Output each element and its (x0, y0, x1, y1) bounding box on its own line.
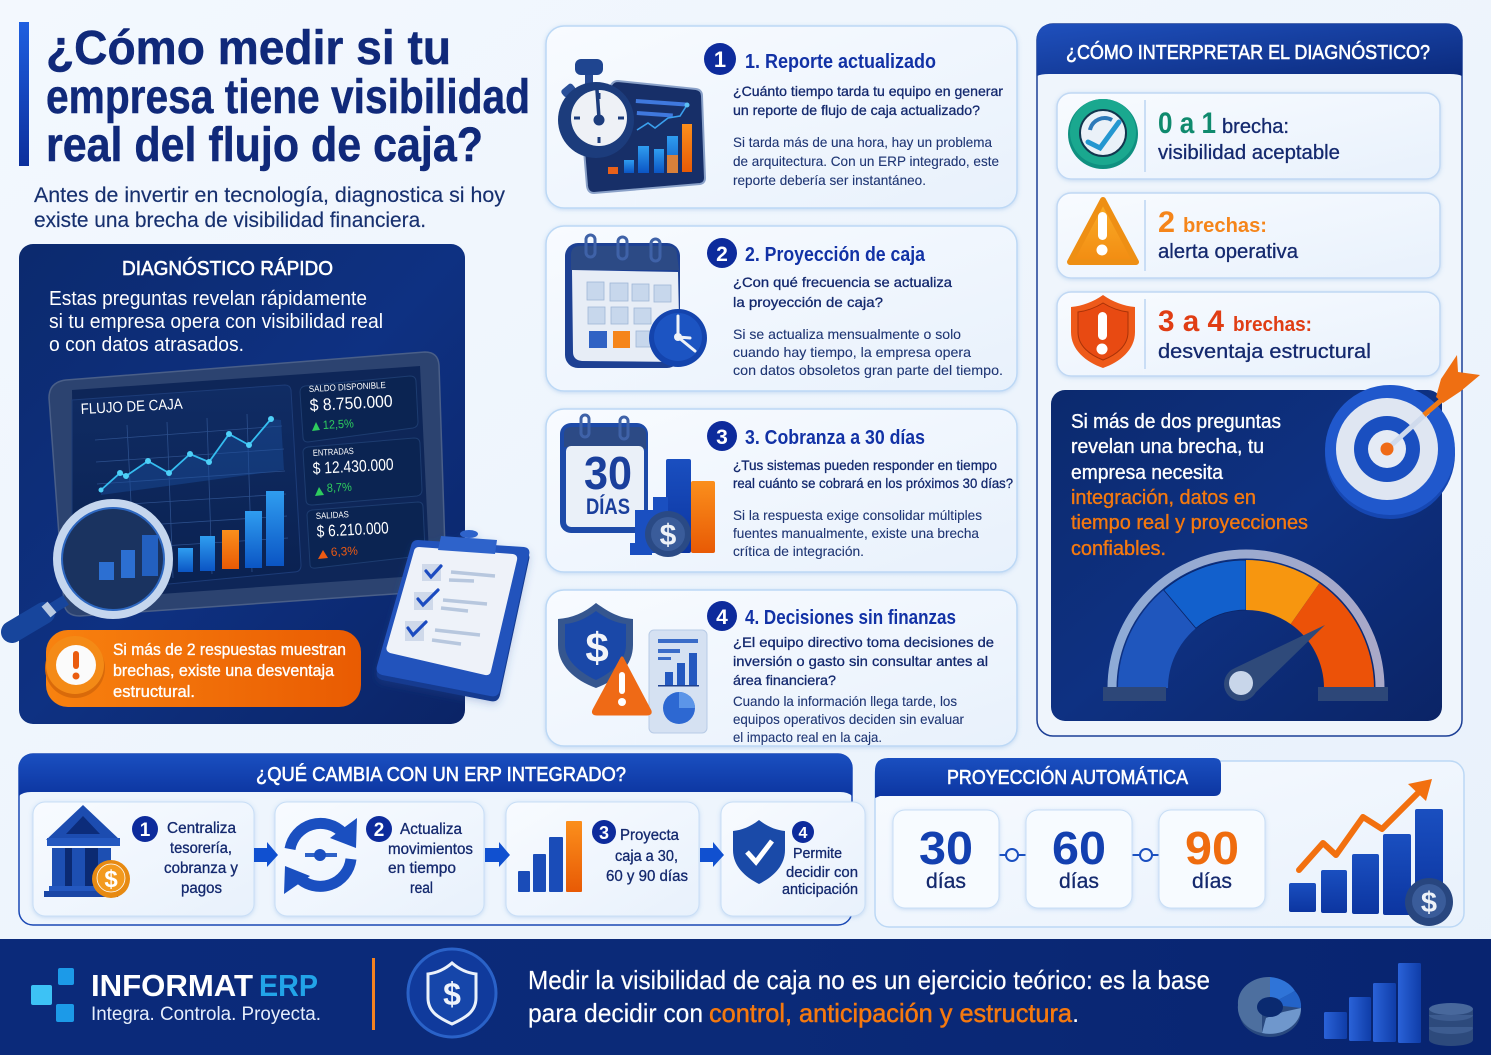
logo: Integra. Controla. Proyecta. (91, 1004, 321, 1025)
text (388, 821, 473, 897)
card: reporte actualizado (546, 26, 1017, 208)
explanation (733, 134, 999, 188)
intro text: si tu empresa opera con visibilidad real (49, 311, 383, 333)
text: en tiempo (388, 860, 456, 877)
explanation: de arquitectura. Con un ERP integrado, este (733, 153, 999, 169)
logo: ERP (259, 968, 318, 1003)
row: 0 a 1 brecha (1057, 93, 1440, 179)
text: Proyecta (620, 827, 679, 844)
icon: teal gauge check (1068, 99, 1138, 169)
icon: 30-day calendar and bars: 30 (584, 447, 632, 499)
question: real cuánto se cobrará en los próximos 30 días? (733, 475, 1013, 491)
text: tesorería, (170, 840, 232, 857)
stat card: entradas (303, 438, 422, 505)
explanation: Cuando la información llega tarde, los (733, 693, 957, 709)
question: ¿Cuánto tiempo tarda tu equipo en generar (733, 83, 1003, 99)
connector 1 (999, 849, 1026, 861)
cash flow chart: FLUJO DE CAJA (80, 396, 183, 418)
icon: clipboard checklist (377, 530, 529, 701)
gauge (1103, 554, 1388, 701)
closing message: para decidir con (528, 998, 703, 1028)
footer band (0, 939, 1491, 1055)
explanation: el impacto real en la caja. (733, 729, 882, 745)
question: ¿Con qué frecuencia se actualiza (733, 274, 952, 290)
explanation (733, 326, 1003, 378)
question: ¿El equipo directivo toma decisiones de (733, 634, 994, 650)
icon: magnifying glass (12, 499, 173, 632)
heading tab: PROYECCIÓN AUTOMÁTICA (947, 766, 1189, 789)
badge (132, 816, 158, 842)
explanation: equipos operativos deciden sin evaluar (733, 711, 964, 727)
title (19, 22, 530, 172)
step 2 (275, 802, 484, 916)
subtitle (34, 184, 506, 232)
tile: 30 días: días (926, 870, 966, 893)
question (733, 457, 1013, 491)
badge 3: 3 (716, 426, 728, 449)
callout panel with gauge (1051, 355, 1480, 721)
icon: coin stack (1429, 1003, 1473, 1046)
badge: 3 (599, 823, 609, 843)
badge 4 (707, 601, 737, 631)
question: área financiera? (733, 672, 836, 688)
card: cobranza a 30 días (546, 409, 1017, 572)
arrow 3 (700, 842, 724, 867)
panel: qué cambia con un ERP integrado (19, 754, 865, 925)
explanation: fuentes manualmente, existe una brecha (733, 525, 979, 541)
row: 3 a 4 brechas (1057, 292, 1440, 376)
text: movimientos (388, 841, 473, 858)
callout text: Si más de dos preguntas (1071, 411, 1281, 433)
badge (366, 816, 392, 842)
question: inversión o gasto sin consultar antes al (733, 653, 988, 669)
question (733, 274, 952, 310)
icon: shield, warning and report (558, 603, 707, 733)
icon: shield, warning and report: $ (585, 624, 609, 671)
badge 1: 1 (714, 47, 726, 72)
arrow 1 (254, 842, 278, 867)
tile: 60 días: 60 (1052, 822, 1106, 874)
closing message: . (1072, 998, 1079, 1028)
explanation (733, 507, 982, 559)
closing message: Medir la visibilidad de caja no es un ejercicio teórico: es la base (528, 965, 1210, 995)
question: un reporte de flujo de caja actualizado? (733, 102, 980, 118)
explanation: Si tarda más de una hora, hay un problema (733, 134, 992, 150)
icon: bars (518, 821, 582, 892)
heading: ¿CÓMO INTERPRETAR EL DIAGNÓSTICO? (1066, 41, 1430, 64)
icon: calendar with clock (565, 235, 707, 368)
text: cobranza y (164, 860, 238, 877)
heading: diagnóstico rápido: DIAGNÓSTICO RÁPIDO (122, 257, 333, 280)
row: 2 brechas: 2 (1158, 206, 1175, 239)
callout: warning banner (45, 630, 361, 707)
intro text (49, 288, 383, 356)
stat card: saldo disponible: 12,5% (322, 416, 354, 432)
title: ¿Cómo medir si tu (46, 22, 451, 75)
icon: 30-day calendar and bars (560, 415, 715, 557)
icon: shield check (733, 820, 785, 884)
card: decisiones sin finanzas (546, 590, 1017, 746)
badge: 4 (799, 825, 808, 842)
intro text: Estas preguntas revelan rápidamente (49, 288, 367, 310)
cash flow chart (72, 385, 301, 592)
callout text: tiempo real y proyecciones (1071, 512, 1308, 534)
badge (592, 820, 616, 844)
row: 2 brechas: brechas: (1183, 215, 1267, 237)
row: 3 a 4 brechas: brechas: (1233, 314, 1312, 336)
stat card: entradas: 8,7% (326, 480, 352, 495)
panel: diagnóstico rápido (12, 244, 529, 724)
icon: sync arrows (284, 818, 357, 894)
stat card: salidas: SALIDAS (316, 509, 349, 521)
badge 4: 4 (716, 606, 728, 629)
row: 0 a 1 brecha: 0 a 1 (1158, 107, 1216, 140)
question: ¿Tus sistemas pueden responder en tiempo (733, 457, 997, 473)
heading: 3. Cobranza a 30 días (745, 427, 925, 449)
title: empresa tiene visibilidad (46, 71, 530, 124)
row: 2 brechas (1057, 193, 1440, 278)
explanation: reporte debería ser instantáneo. (733, 172, 926, 188)
badge (792, 821, 814, 843)
heading: ¿QUÉ CAMBIA CON UN ERP INTEGRADO? (256, 763, 626, 786)
callout text: integración, datos en (1071, 487, 1256, 509)
badge 3 (707, 421, 737, 451)
row: 3 a 4 brechas: 3 a 4 (1158, 305, 1224, 338)
arrow 2 (485, 842, 510, 867)
icon: stopwatch and dashboard (558, 59, 705, 193)
icon: bank with coin (44, 805, 130, 898)
callout: warning banner: brechas, existe una desventaja (113, 662, 335, 680)
text: decidir con (786, 865, 858, 881)
subtitle: Antes de invertir en tecnología, diagnostica si hoy (34, 184, 506, 207)
callout text: confiables. (1071, 538, 1166, 560)
text: Permite (793, 846, 842, 862)
icon: footer bars (1324, 963, 1421, 1043)
question: la proyección de caja? (733, 294, 883, 310)
heading: 1. Reporte actualizado (745, 51, 936, 73)
text: anticipación (782, 882, 858, 898)
text (606, 827, 688, 885)
stat card: entradas: ENTRADAS (313, 446, 354, 458)
icon: target with arrow (1325, 355, 1480, 519)
intro text: o con datos atrasados. (49, 334, 244, 356)
badge 2: 2 (716, 243, 728, 266)
callout text: revelan una brecha, tu (1071, 436, 1264, 458)
row: 3 a 4 brechas: desventaja estructural (1158, 340, 1371, 363)
panel: proyección automática (875, 758, 1464, 927)
stat card: saldo disponible: $ 8.750.000 (309, 392, 393, 415)
text: 60 y 90 días (606, 868, 688, 885)
icon: 30-day calendar and bars: DÍAS (586, 494, 630, 519)
tile: 60 días: días (1059, 870, 1099, 893)
row: 2 brechas: alerta operativa (1158, 240, 1299, 263)
closing message: control, anticipación y estructura (709, 998, 1073, 1028)
icon: shield badge: $ (443, 976, 461, 1012)
icon: growth chart with coin (1289, 779, 1453, 926)
panel: cómo interpretar el diagnóstico (1037, 24, 1480, 736)
dashboard tablet (49, 352, 446, 616)
badge 1 (704, 43, 736, 75)
icon: red shield (1071, 295, 1135, 368)
text: Actualiza (400, 821, 462, 838)
badge: 2 (374, 820, 384, 841)
badge 2 (707, 238, 737, 268)
heading tab (875, 758, 1221, 798)
explanation: cuando hay tiempo, la empresa opera (733, 344, 971, 360)
callout: warning banner: Si más de 2 respuestas muestran (113, 641, 346, 659)
row: 0 a 1 brecha: brecha: (1222, 116, 1289, 138)
icon: warning triangle (1070, 200, 1136, 262)
explanation: Si se actualiza mensualmente o solo (733, 326, 961, 342)
step 1 (33, 802, 254, 916)
step 4 (721, 802, 865, 916)
icon: shield badge (408, 949, 496, 1037)
heading: 2. Proyección de caja (745, 244, 926, 266)
text (782, 846, 858, 898)
text: Centraliza (167, 820, 236, 837)
stat card: salidas: 6,3% (330, 544, 358, 559)
heading: 4. Decisiones sin finanzas (745, 607, 956, 629)
icon: growth chart with coin: $ (1421, 887, 1437, 919)
logo: INFORMAT (91, 968, 253, 1003)
connector 2 (1132, 849, 1159, 861)
explanation (733, 693, 964, 745)
stat card: saldo disponible (300, 376, 418, 442)
question (733, 83, 1003, 118)
explanation: con datos obsoletos gran parte del tiempo. (733, 362, 1003, 378)
row: 0 a 1 brecha: visibilidad aceptable (1158, 141, 1340, 164)
icon: 30-day calendar and bars: $ (660, 519, 677, 552)
explanation: crítica de integración. (733, 543, 864, 559)
card: proyección de caja (546, 226, 1017, 391)
callout text: empresa necesita (1071, 462, 1224, 484)
closing message (528, 965, 1210, 1028)
question (733, 634, 994, 688)
tile: 90 días: días (1192, 870, 1232, 893)
tile: 90 días: 90 (1185, 822, 1239, 874)
explanation: Si la respuesta exige consolidar múltiples (733, 507, 982, 523)
tile: 30 días: 30 (919, 822, 973, 874)
step 3 (506, 802, 699, 916)
icon: donut chart (1238, 977, 1301, 1037)
text (164, 820, 238, 897)
text: caja a 30, (615, 848, 678, 865)
tile: 60 días (1026, 810, 1132, 908)
text: pagos (181, 880, 222, 897)
stat card: salidas: $ 6.210.000 (316, 519, 389, 541)
stat card: entradas: $ 12.430.000 (312, 456, 394, 478)
logo (31, 968, 321, 1025)
badge: 1 (140, 820, 151, 841)
callout: warning banner: estructural. (113, 683, 195, 701)
text: real (410, 880, 433, 897)
icon: bank with coin: $ (104, 866, 118, 893)
title: real del flujo de caja? (46, 119, 483, 172)
tile: 90 días (1159, 810, 1265, 908)
subtitle: existe una brecha de visibilidad financiera. (34, 209, 426, 232)
stat card: salidas (307, 502, 425, 568)
callout text (1071, 411, 1308, 560)
tile: 30 días (893, 810, 999, 908)
stat card: saldo disponible: SALDO DISPONIBLE (309, 380, 386, 394)
